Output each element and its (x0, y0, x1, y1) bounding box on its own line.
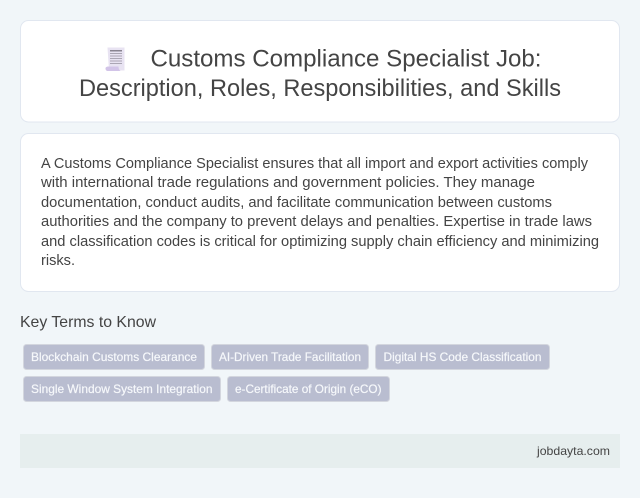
text block: description: with international trade regulations and government policies. They manage (40, 175, 535, 191)
tag: e-Certificate of Origin (eCO): e-Certificate of Origin (eCO) (235, 382, 382, 396)
text block: description: A Customs Compliance Specialist ensures that all import and export activities comply (41, 156, 589, 172)
panel: description card (20, 134, 620, 292)
text block: description (40, 156, 599, 269)
tag: Digital HS Code Classification: Digital HS Code Classification (384, 350, 542, 364)
text block: description: authorities and the company to prevent delays and penalties. Expertise in trade laws (41, 214, 592, 230)
tag: Digital HS Code Classification (376, 344, 550, 370)
text block: description: documentation, conduct audits, and facilitate communication between customs (41, 195, 552, 211)
heading: key terms: Key Terms to Know (20, 314, 156, 331)
icon: receipt scroll (106, 48, 124, 71)
panel: title card (20, 20, 620, 122)
tag: e-Certificate of Origin (eCO) (228, 376, 390, 402)
title: Customs Compliance Specialist Job: (150, 46, 542, 72)
title (79, 46, 561, 102)
footer bar: jobdayta.com (536, 444, 610, 458)
tag: Single Window System Integration (24, 376, 220, 402)
tag: AI-Driven Trade Facilitation (212, 344, 368, 370)
text block: description: risks. (41, 253, 75, 269)
footer bar (20, 434, 620, 468)
tag: Blockchain Customs Clearance (24, 344, 204, 370)
tag: Blockchain Customs Clearance: Blockchain Customs Clearance (31, 350, 197, 364)
tag: Single Window System Integration: Single Window System Integration (31, 382, 212, 396)
text block: description: and classification codes is critical for optimizing supply chain efficiency and minimizing (41, 234, 599, 250)
tag: AI-Driven Trade Facilitation: AI-Driven Trade Facilitation (219, 350, 361, 364)
title: Description, Roles, Responsibilities, and Skills (79, 75, 561, 102)
